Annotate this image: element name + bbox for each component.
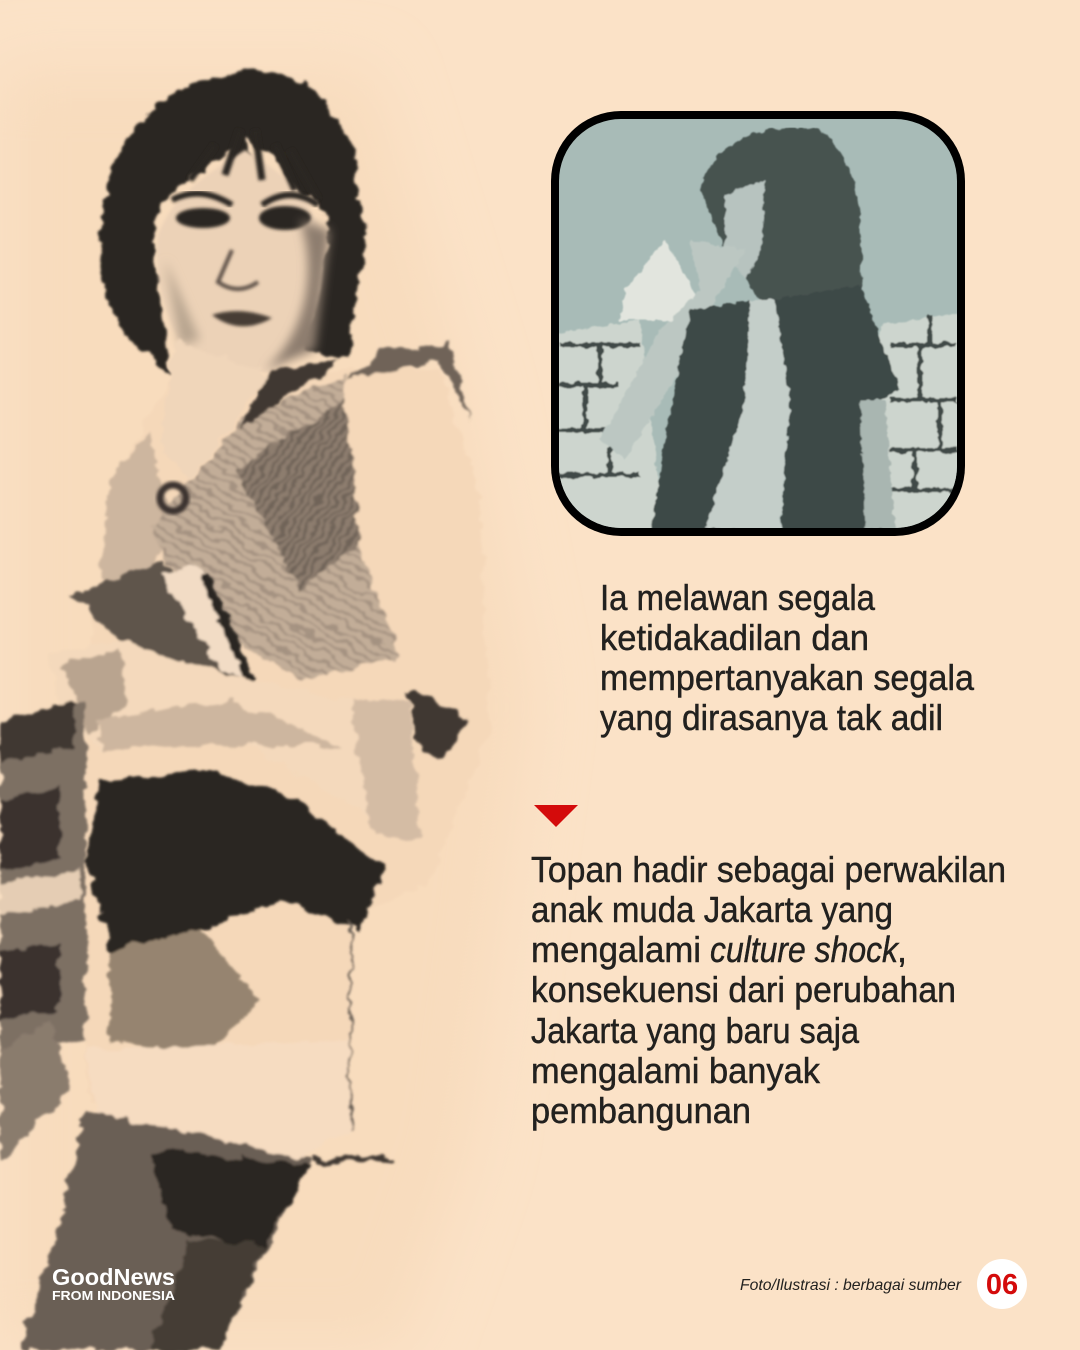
arm and hand xyxy=(50,640,415,840)
body text: second paragraph: anak muda Jakarta yang xyxy=(531,889,893,930)
brick wall xyxy=(559,319,660,528)
hair xyxy=(100,70,364,375)
shirt and torso mid tones xyxy=(60,370,490,1130)
icon: red down-pointing triangle xyxy=(534,805,578,827)
body text: first paragraph: yang dirasanya tak adil xyxy=(600,697,943,738)
railing at left xyxy=(0,700,85,1050)
eyebrows xyxy=(172,194,318,205)
body text: second paragraph: mengalami xyxy=(531,929,701,970)
face xyxy=(725,180,765,280)
pendant xyxy=(160,485,186,511)
photo frame: Topan smoking against a brick wall xyxy=(550,111,965,540)
denim vest xyxy=(650,285,900,540)
long hair xyxy=(699,128,864,301)
body text: second paragraph: pembangunan xyxy=(531,1090,751,1131)
paper glow behind sketch xyxy=(0,70,530,1350)
trousers xyxy=(20,1110,310,1350)
dark shirt shadow xyxy=(85,770,385,1000)
body text: first paragraph: mempertanyakan segala xyxy=(600,657,975,698)
logo: GoodNews from Indonesia: GoodNews xyxy=(52,1264,175,1290)
body text: first paragraph: Ia melawan segala xyxy=(600,577,876,618)
page number badge xyxy=(977,1259,1027,1309)
body text: second paragraph: Topan hadir sebagai perwakilan xyxy=(531,849,1006,890)
book xyxy=(70,560,250,720)
face shading xyxy=(265,220,330,370)
body text: second paragraph: culture shock xyxy=(710,929,900,970)
body text: first paragraph: ketidakadilan dan xyxy=(600,617,869,658)
neck xyxy=(160,340,270,480)
body text: second paragraph xyxy=(531,849,1006,1131)
body text: second paragraph: mengalami banyak xyxy=(531,1050,821,1091)
illustration: pencil sketch of Topan xyxy=(0,70,530,1350)
forehead hair strands xyxy=(190,130,318,200)
logo: GoodNews from Indonesia xyxy=(52,1264,175,1303)
nose and mouth xyxy=(218,250,258,289)
photo sky xyxy=(559,119,957,528)
body text: first paragraph xyxy=(600,577,975,738)
body text: second paragraph: Jakarta yang baru saja xyxy=(531,1010,860,1051)
logo: GoodNews from Indonesia: FROM INDONESIA xyxy=(52,1289,175,1303)
bare right arm xyxy=(860,400,895,530)
eyes xyxy=(176,208,230,228)
body text: second paragraph: , xyxy=(897,929,907,970)
page number badge: 06 xyxy=(986,1269,1018,1301)
body text: second paragraph: konsekuensi dari perubahan xyxy=(531,969,956,1010)
face xyxy=(157,150,323,372)
lower shirt xyxy=(85,1040,350,1160)
raised arm xyxy=(600,240,745,460)
source credit: Foto/Ilustrasi : berbagai sumber xyxy=(740,1277,962,1294)
bare chest xyxy=(705,300,790,530)
